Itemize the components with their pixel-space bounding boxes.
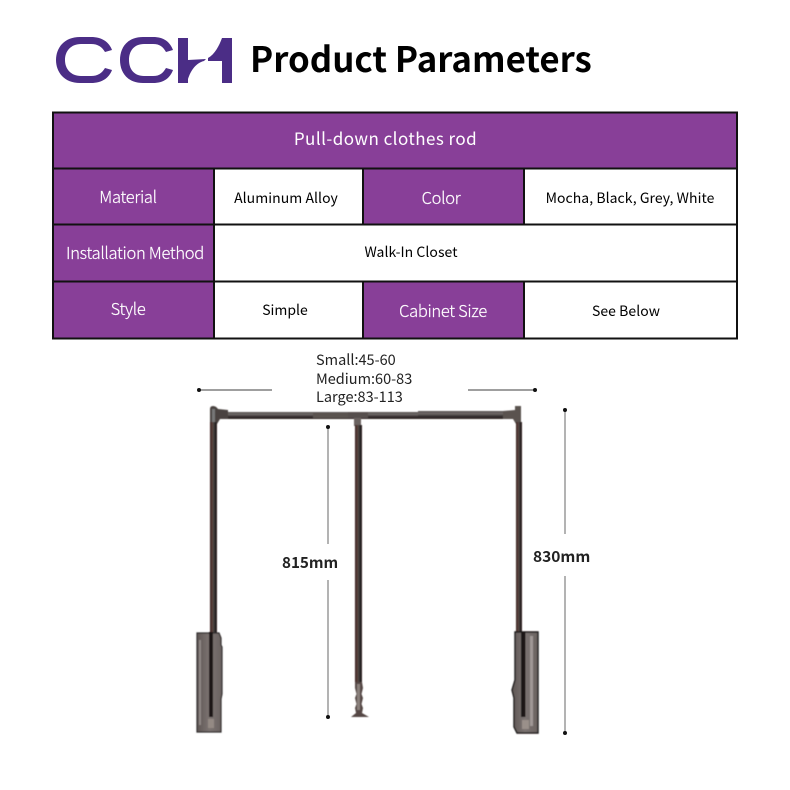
right arm bbox=[503, 406, 522, 634]
width dimension arrow: left bbox=[197, 388, 272, 392]
width dimension arrow: right bbox=[468, 388, 537, 392]
left handle bbox=[197, 632, 222, 732]
830mm label: 830mm bbox=[533, 545, 590, 567]
row: installation method: Installation Method bbox=[66, 240, 204, 264]
row: installation method: Walk-In Closet bbox=[364, 242, 458, 262]
center pole bbox=[351, 418, 369, 717]
top bar bbox=[225, 411, 510, 419]
table header: product name bbox=[53, 112, 737, 169]
table header: product name: Pull-down clothes rod bbox=[294, 125, 477, 150]
row: material and color bbox=[53, 169, 715, 225]
row: material and color: Aluminum Alloy bbox=[234, 188, 339, 208]
inner height dimension line bbox=[326, 425, 330, 719]
pull-down rod product bbox=[197, 406, 538, 733]
left arm bbox=[210, 406, 228, 634]
outer height label background bbox=[532, 534, 592, 576]
row: material and color: Material bbox=[99, 184, 157, 208]
size labels: Medium:60-83 bbox=[316, 368, 412, 389]
logo: CCH bbox=[56, 37, 232, 83]
row: style and cabinet size: Simple bbox=[262, 300, 308, 320]
right handle bbox=[512, 632, 538, 733]
parameters table bbox=[53, 112, 737, 339]
row: material and color: Mocha, Black, Grey, White bbox=[546, 188, 715, 208]
size labels: Small:45-60 bbox=[316, 349, 396, 370]
row: installation method bbox=[53, 225, 458, 281]
row: style and cabinet size bbox=[53, 282, 660, 339]
outer height dimension line bbox=[563, 408, 567, 735]
row: style and cabinet size: Cabinet Size bbox=[399, 298, 487, 322]
row: style and cabinet size: Style bbox=[111, 296, 146, 320]
815mm label: 815mm bbox=[282, 551, 338, 573]
inner height label background bbox=[279, 544, 341, 580]
size labels: Large:83-113 bbox=[316, 386, 403, 407]
row: style and cabinet size: See Below bbox=[592, 301, 660, 321]
title: Product Parameters bbox=[250, 33, 592, 83]
row: material and color: Color bbox=[422, 185, 461, 209]
